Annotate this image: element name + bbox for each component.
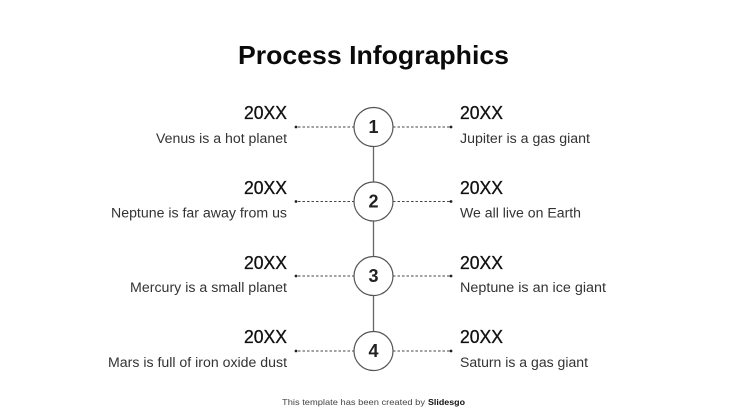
step 3 [130,253,606,296]
left entry 3 [130,253,287,295]
right entry 1: 20XX [460,103,503,123]
node 2: 2 [368,192,379,212]
right entry 3 [460,253,606,295]
footer credit: This template has been created by [282,397,426,407]
left entry 2: Neptune is far away from us [111,206,287,220]
node 1: 1 [368,117,379,137]
timeline connector [372,127,374,351]
node 2 [354,182,393,221]
right entry 4 [460,327,588,370]
left entry 3: 20XX [244,253,287,273]
connectors 4 [295,350,452,352]
node 3 [354,256,393,296]
connectors 3 [295,275,452,277]
right entry 1 [460,103,590,146]
left entry 1 [156,103,287,146]
right entry 1: Jupiter is a gas giant [460,131,590,146]
connectors 2 [295,200,452,203]
right entry 2: We all live on Earth [460,206,581,220]
right entry 3: 20XX [460,253,503,273]
left entry 4 [108,327,287,370]
node 4 [354,332,393,370]
left entry 1: 20XX [244,103,287,123]
step 1 [156,103,590,146]
right entry 4: 20XX [460,327,503,347]
left entry 1: Venus is a hot planet [156,131,287,146]
connectors 1 [295,126,452,128]
footer credit: Slidesgo [428,397,465,407]
right entry 2: 20XX [460,178,503,198]
title: Process Infographics [238,40,509,70]
right entry 4: Saturn is a gas giant [460,355,588,370]
node 3: 3 [368,266,379,286]
step 2 [111,178,581,221]
left entry 2 [111,178,287,220]
right entry 2 [460,178,581,220]
left entry 2: 20XX [244,178,287,198]
left entry 4: 20XX [244,327,287,347]
left entry 3: Mercury is a small planet [130,280,287,295]
node 4: 4 [368,341,379,361]
node 1 [354,108,393,146]
step 4 [108,327,588,370]
right entry 3: Neptune is an ice giant [460,280,606,295]
left entry 4: Mars is full of iron oxide dust [108,355,287,370]
